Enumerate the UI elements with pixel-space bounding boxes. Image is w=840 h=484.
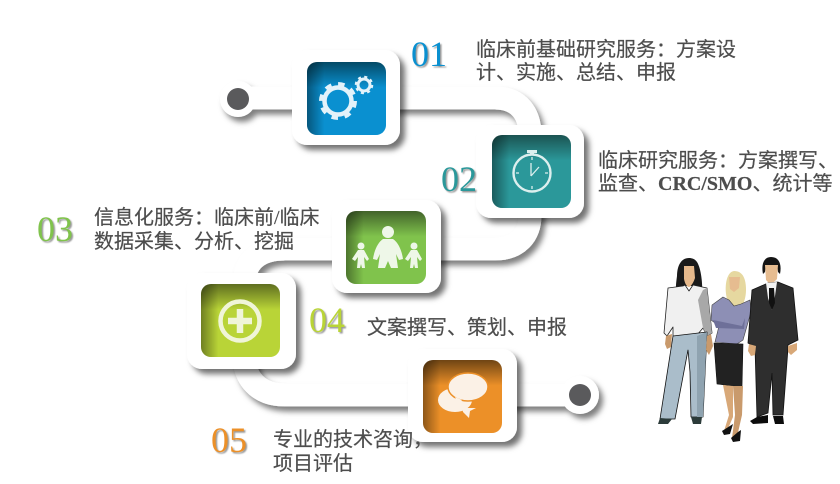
text 01: 临床前基础研究服务：方案设 (476, 39, 736, 61)
text 05 (273, 428, 433, 475)
woman in purple jacket (711, 271, 751, 442)
number 03: 03 (37, 209, 73, 249)
icon: family (352, 226, 422, 268)
card 5 (408, 349, 517, 442)
text 03: 数据采集、分析、挖掘 (94, 231, 294, 253)
text 04: 文案撰写、策划、申报 (367, 317, 567, 339)
icon: plus circle (220, 302, 260, 340)
number 04: 04 (309, 300, 345, 340)
end dot (569, 384, 591, 406)
text 05: 专业的技术咨询， (273, 429, 433, 451)
man in dark suit (748, 257, 798, 424)
woman in white shirt (658, 258, 713, 424)
text 03 (94, 206, 320, 253)
text 05: 项目评估 (273, 453, 353, 475)
text 02: 监查、CRC/SMO、统计等 (598, 173, 832, 195)
text 02 (598, 150, 838, 195)
icon: stopwatch (514, 150, 550, 192)
text 02: 临床研究服务：方案撰写、 (598, 150, 838, 172)
icon: gears (321, 77, 372, 118)
card 4 (187, 273, 296, 369)
card 2 (476, 125, 584, 218)
number 02: 02 (441, 159, 477, 199)
card 3 (332, 200, 441, 293)
text 01 (476, 38, 736, 84)
connector path (220, 81, 599, 414)
illustration: three business people (658, 257, 798, 442)
number 01: 01 (411, 34, 447, 74)
card 1 (292, 50, 400, 145)
icon: speech bubbles (438, 373, 488, 418)
text 01: 计、实施、总结、申报 (476, 62, 676, 84)
start dot (227, 88, 249, 110)
number 05: 05 (211, 420, 247, 460)
text 03: 信息化服务：临床前/临床 (94, 207, 320, 229)
